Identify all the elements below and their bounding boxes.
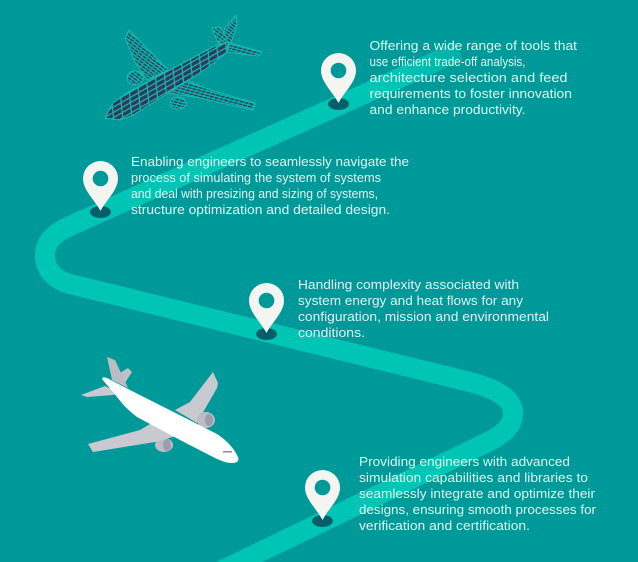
text block 1: and enhance productivity. — [370, 103, 526, 117]
wireframe aircraft illustration — [105, 15, 262, 120]
text block 3: configuration, mission and environmental — [298, 310, 549, 324]
map pin 3 — [249, 283, 284, 340]
text block 2: structure optimization and detailed design. — [131, 203, 390, 217]
text block 2: and deal with presizing and sizing of systems, — [131, 187, 378, 201]
text block 4 — [359, 455, 596, 533]
winding road path — [45, 51, 513, 562]
text block 1: use efficient trade-off analysis, — [370, 55, 526, 69]
text block 1: architecture selection and feed — [370, 71, 568, 85]
text block 1 — [370, 39, 578, 117]
text block 4: simulation capabilities and libraries to — [359, 471, 588, 485]
text block 2 — [131, 155, 409, 217]
text block 1: requirements to foster innovation — [370, 87, 572, 101]
text block 1: Offering a wide range of tools that — [370, 39, 578, 53]
text block 2: Enabling engineers to seamlessly navigate the — [131, 155, 409, 169]
text block 4: Providing engineers with advanced — [359, 455, 570, 469]
text block 3 — [298, 278, 549, 340]
white aircraft illustration — [81, 357, 238, 463]
text block 4: verification and certification. — [359, 519, 530, 533]
text block 3: Handling complexity associated with — [298, 278, 519, 292]
text block 3: conditions. — [298, 326, 365, 340]
text block 3: system energy and heat flows for any — [298, 294, 524, 308]
text block 2: process of simulating the system of systems — [131, 171, 381, 185]
text block 4: designs, ensuring smooth processes for — [359, 503, 596, 517]
text block 4: seamlessly integrate and optimize their — [359, 487, 595, 501]
map pin 1 — [321, 53, 356, 110]
map pin 2 — [83, 161, 118, 218]
map pin 4 — [305, 470, 340, 527]
